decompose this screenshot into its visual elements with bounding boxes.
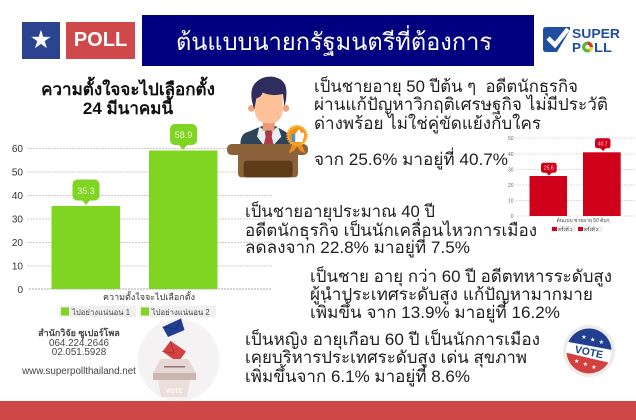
logo: Super Poll: SUPER — [572, 26, 621, 41]
contact block: www.superpollthailand.net — [22, 366, 136, 377]
text block: candidate 2: เป็นชายอายุประมาณ 40 ปี — [245, 200, 435, 222]
icon: star box — [22, 22, 60, 59]
contact block: 064.224.2646 — [49, 338, 109, 348]
heading: voting intention: 24 มีนาคมนี้ — [83, 99, 173, 118]
bar 1: 25.6 — [544, 166, 554, 172]
bar 2: 40.7 — [598, 141, 608, 147]
text block: candidate 4: เคยบริหารประเทศระดับสูง เด่น สุขภาพ — [245, 348, 527, 368]
bar chart: voting intention: 50 — [12, 168, 23, 178]
text block: candidate 2: ลดลงจาก 22.8% มาอยู่ที่ 7.5% — [245, 235, 470, 258]
legend: ครั้งที่ 2 — [584, 226, 599, 232]
bar 2 — [149, 124, 218, 289]
text block: candidate 1: ผ่านแก้ปัญหาวิกฤติเศรษฐกิจ ไม่มีประวัติ — [314, 94, 608, 115]
icon: star box: ★ — [30, 26, 52, 54]
bar chart: voting intention: 0 — [17, 285, 23, 296]
icon: vote badge: ★ — [583, 361, 588, 368]
badge: POLL: POLL — [74, 29, 127, 51]
text block: candidate 2: อดีตนักธุรกิจ เป็นนักเคลื่อนไหวการเมือง — [245, 218, 537, 241]
badge: POLL — [66, 22, 135, 59]
icon: speaker at podium — [227, 76, 308, 178]
small bar chart: candidate 1: 50 — [508, 136, 514, 142]
text block: candidate 3: เป็นชาย อายุ กว่า 60 ปี อดีตทหารระดับสูง — [310, 265, 612, 287]
icon: ballot box — [138, 318, 220, 401]
text block: candidate 3: ผู้นำประเทศระดับสูง แก้ปัญหามากมาย — [310, 285, 593, 305]
small bar chart: candidate 1: 10 — [508, 198, 514, 204]
legend: ครั้งที่ 1 — [558, 226, 573, 232]
small bar chart: candidate 1: 20 — [508, 183, 514, 189]
text block: candidate 3: เพิ่มขึ้น จาก 13.9% มาอยู่ที่ 16.2% — [310, 300, 560, 323]
text block: candidate 1: ด่างพร้อย ไม่ใช่คู่ขัดแย้งกับใคร — [314, 113, 541, 134]
small bar chart: candidate 1: 40 — [508, 152, 514, 158]
icon: vote badge: ★ — [591, 364, 597, 371]
bar chart: voting intention: 40 — [12, 191, 23, 202]
title banner: ต้นแบบนายกรัฐมนตรีที่ต้องการ — [176, 25, 492, 56]
text: candidate 1 change: จาก 25.6% มาอยู่ที่ 40.7% — [314, 147, 508, 170]
legend — [59, 306, 216, 318]
logo: Super Poll: P — [572, 40, 581, 55]
legend: ไปอย่างแน่นอน 1 — [71, 308, 131, 317]
contact block: สำนักวิจัย ซูเปอร์โพล — [38, 328, 120, 338]
icon: ballot box: VOTE — [166, 389, 182, 395]
icon: vote badge: ★ — [581, 334, 587, 341]
footer bar — [0, 401, 636, 420]
bar 2: 58.9 — [175, 130, 192, 140]
icon: vote badge: ★ — [574, 358, 579, 365]
logo: Super Poll — [543, 26, 621, 55]
title banner — [142, 15, 534, 66]
text block: candidate 3 — [310, 265, 612, 323]
icon: vote badge: VOTE — [574, 344, 604, 361]
contact block: 02.051.5928 — [52, 347, 106, 358]
bar 1 — [52, 180, 120, 289]
text block: candidate 1: เป็นชายอายุ 50 ปีต้น ๆ อดีตนักธุรกิจ — [314, 75, 578, 97]
icon: vote badge: ★ — [599, 339, 604, 346]
axis label: ความตั้งใจจะไปเลือกตั้ง — [103, 291, 195, 302]
small bar chart: candidate 1: 30 — [508, 168, 514, 174]
icon: vote badge — [563, 325, 615, 377]
bar chart: voting intention: 10 — [12, 262, 23, 272]
heading: voting intention — [41, 76, 215, 118]
text block: candidate 4: เป็นหญิง อายุเกือบ 60 ปี เป็นนักการเมือง — [245, 328, 540, 350]
bar 2 — [583, 138, 621, 216]
bar 1: 35.3 — [77, 186, 95, 196]
text block: candidate 4 — [245, 328, 540, 387]
bar chart: voting intention: 30 — [12, 214, 23, 226]
bar 1 — [530, 163, 567, 216]
bar chart: voting intention: 20 — [12, 238, 23, 249]
icon: vote badge: ★ — [590, 336, 595, 344]
text block: candidate 1 — [314, 75, 608, 134]
heading: voting intention: ความตั้งใจจะไปเลือกตั้ง — [41, 80, 215, 99]
text block: candidate 2 — [245, 200, 537, 258]
bar chart: voting intention: 60 — [12, 144, 23, 155]
axis label: ต้นแบบ ชายอายุ 50 ต้นๆ — [556, 217, 610, 224]
contact block — [22, 328, 136, 377]
small bar chart: candidate 1: 0 — [511, 214, 514, 220]
bar chart: voting intention — [12, 124, 272, 318]
small bar chart: candidate 1 — [508, 136, 635, 232]
text block: candidate 4: เพิ่มขึ้นจาก 6.1% มาอยู่ที่ 8.6% — [245, 364, 470, 387]
logo: Super Poll: LL — [594, 40, 612, 55]
legend: ไปอย่างแน่นอน 2 — [151, 308, 210, 317]
legend — [551, 226, 602, 232]
